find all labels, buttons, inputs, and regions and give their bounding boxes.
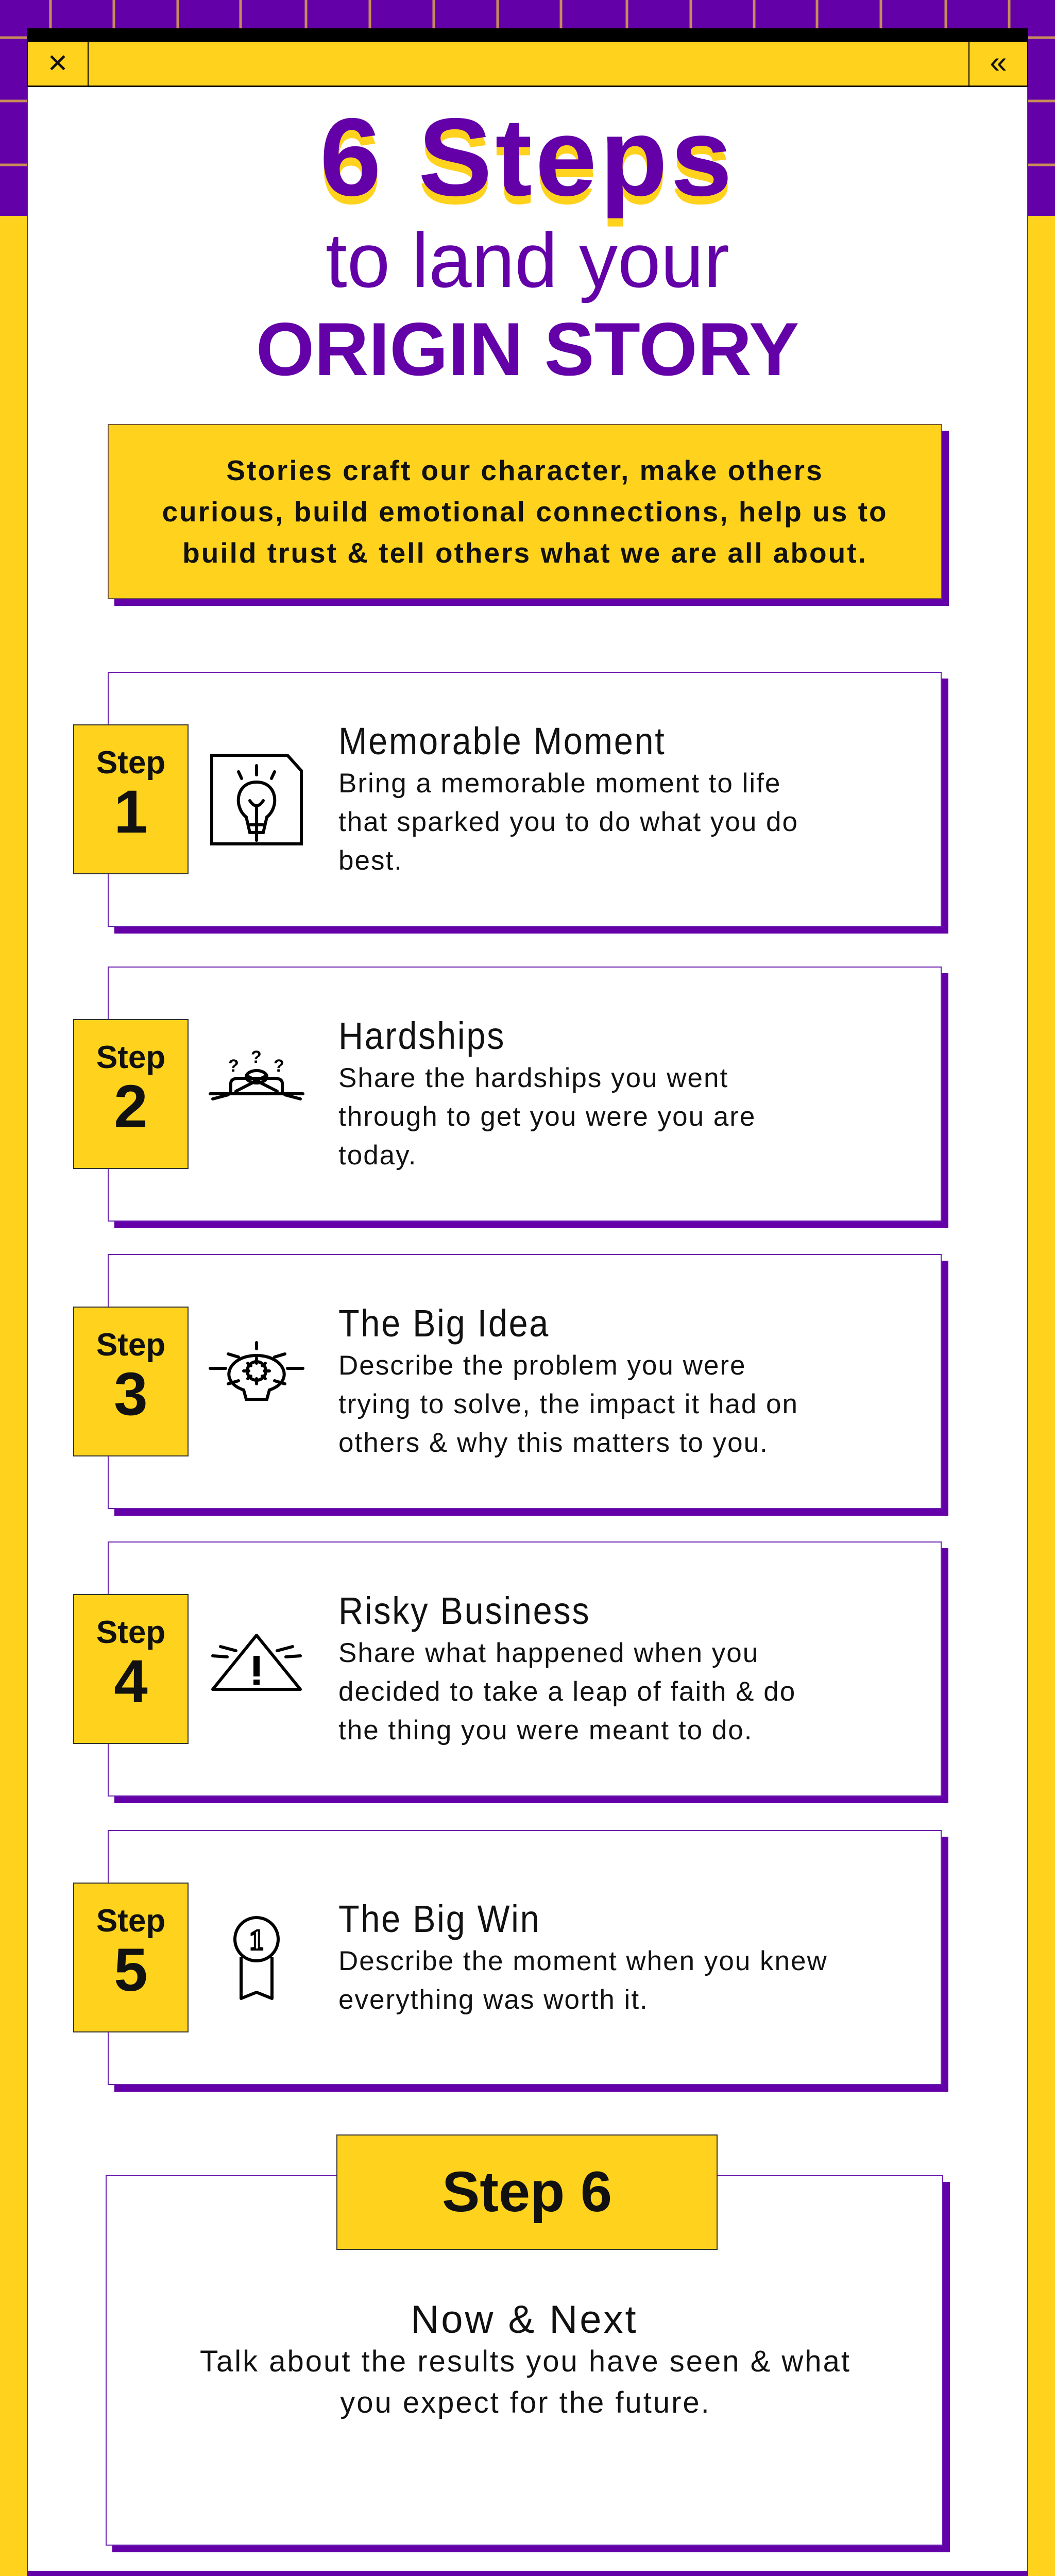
text: now & next: Now & Next <box>411 2298 638 2342</box>
icon: double chevron: « <box>990 45 1007 79</box>
step badge 5: 5 <box>114 1936 148 2004</box>
title: 6 Steps <box>320 103 735 227</box>
text: risky business: decided to take a leap of faith & do <box>338 1676 796 1707</box>
text: memorable moment: Bring a memorable moment to life <box>338 768 781 799</box>
intro callout: build trust & tell others what we are all about. <box>182 537 867 569</box>
step badge 1: Step <box>96 745 165 781</box>
panel: step 5 <box>108 1830 942 2085</box>
text: the big win: everything was worth it. <box>338 1985 649 2014</box>
text: the big win <box>338 1897 828 2014</box>
text: risky business: the thing you were meant to do. <box>338 1715 753 1745</box>
step badge 5: Step <box>96 1903 165 1939</box>
text: hardships <box>338 1014 756 1171</box>
step badge 2: 2 <box>114 1073 148 1141</box>
text: the big win: Describe the moment when you knew <box>338 1945 828 1976</box>
step badge 5 <box>73 1883 189 2032</box>
text: memorable moment <box>338 720 798 876</box>
step badge 2 <box>73 1019 189 1169</box>
text: risky business: Risky Business <box>338 1589 590 1632</box>
text: the big idea: others & why this matters to you. <box>338 1428 769 1458</box>
panel: step 2 <box>108 967 942 1222</box>
step badge 3 <box>73 1307 189 1456</box>
step badge 4: 4 <box>114 1648 148 1716</box>
icon: double chevron <box>968 42 1027 86</box>
text: step 6 body <box>200 2345 851 2419</box>
intro callout: curious, build emotional connections, help us to <box>162 496 888 528</box>
icon: lightbulb card <box>210 754 303 845</box>
text: hardships: Share the hardships you went <box>338 1063 728 1093</box>
intro callout: Stories craft our character, make others <box>226 454 824 486</box>
step badge 4: Step <box>96 1615 165 1650</box>
text: memorable moment: that sparked you to do what you do <box>338 807 798 837</box>
icon: medal <box>233 1916 280 2000</box>
text: hardships: through to get you were you are <box>338 1101 756 1132</box>
step 6 badge <box>336 2134 718 2250</box>
icon: medal: 1 <box>249 1924 264 1956</box>
text: the big win: The Big Win <box>338 1897 540 1940</box>
step badge 3: 3 <box>114 1360 148 1428</box>
text: risky business: Share what happened when you <box>338 1638 759 1668</box>
step badge 3: Step <box>96 1327 165 1363</box>
step badge 1 <box>73 724 189 874</box>
panel: step 6 <box>106 2175 943 2546</box>
text: the big idea <box>338 1302 798 1458</box>
text: the big idea: The Big Idea <box>338 1302 550 1345</box>
icon: idea gear bulb <box>209 1341 304 1401</box>
step badge 1: 1 <box>114 778 148 846</box>
text: risky business <box>338 1589 796 1745</box>
text: the big idea: Describe the problem you were <box>338 1350 746 1381</box>
window bar <box>27 28 1028 87</box>
text: step 6 body: Talk about the results you have seen & what <box>200 2345 851 2378</box>
text: the big idea: trying to solve, the impact it had on <box>338 1389 798 1419</box>
panel: step 3 <box>108 1254 942 1509</box>
icon: person with questions: ? <box>274 1056 284 1076</box>
icon: person with questions: ? <box>251 1047 262 1067</box>
text: hardships: today. <box>338 1140 417 1171</box>
title: to land your <box>326 217 729 303</box>
step badge 4 <box>73 1594 189 1744</box>
step badge 2: Step <box>96 1040 165 1075</box>
icon: warning triangle <box>211 1634 302 1691</box>
icon: close x <box>28 42 89 86</box>
icon: close x: ✕ <box>47 49 69 78</box>
background: purple header with grid <box>0 0 1055 216</box>
text: hardships: Hardships <box>338 1014 505 1057</box>
text: memorable moment: Memorable Moment <box>338 720 666 762</box>
text: step 6 body: you expect for the future. <box>340 2386 711 2419</box>
icon: person with questions: ? <box>228 1056 239 1076</box>
title <box>256 100 799 388</box>
text: memorable moment: best. <box>338 845 403 876</box>
panel: step 4 <box>108 1541 942 1797</box>
panel: step 1 <box>108 672 942 927</box>
step 6 badge: Step 6 <box>442 2160 612 2224</box>
intro callout <box>108 424 942 599</box>
footer <box>27 2571 1028 2576</box>
icon: person with questions <box>209 1047 304 1100</box>
